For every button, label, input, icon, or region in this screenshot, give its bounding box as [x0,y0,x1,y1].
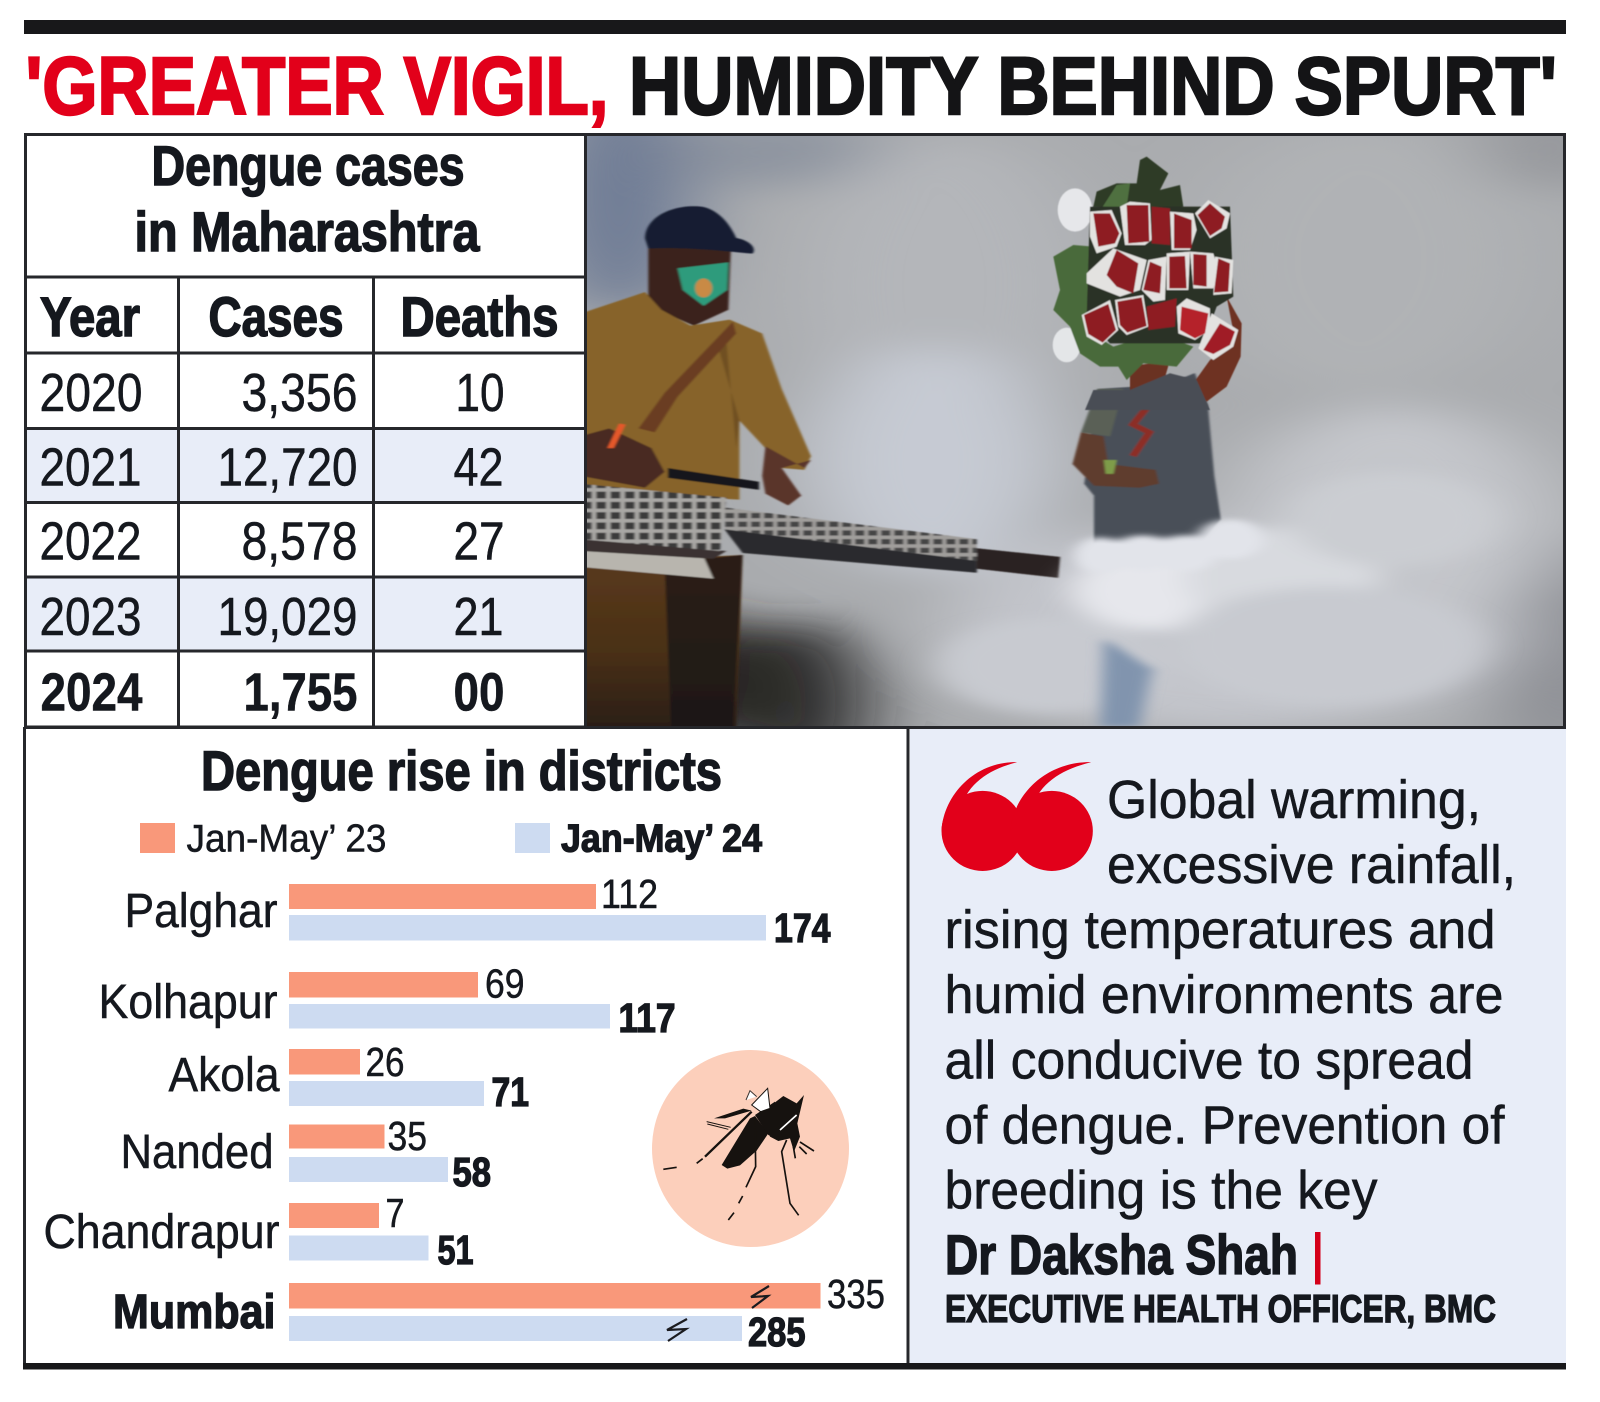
table column headers [40,285,558,348]
photo frame [586,134,1564,726]
photo smoke background [587,136,1563,726]
bars: Mumbai: 335 [827,1271,885,1317]
legend: Jan-May’ 24 [561,818,762,860]
quote text: all conducive to spread [944,1030,1474,1090]
quote text: of dengue. Prevention of [944,1096,1505,1156]
table row 2023: 2023 [40,587,142,647]
bars: Chandrapur: 7 [386,1190,404,1236]
table row shading [26,429,586,651]
table row 2024 [40,662,504,722]
table row 2021: 42 [454,438,504,498]
table row 2024: 1,755 [244,662,358,722]
table heading [134,134,480,263]
bars: Nanded: 35 [388,1113,427,1159]
table column headers: Deaths [400,285,558,348]
bars: Kolhapur [98,960,676,1041]
bars: Nanded [120,1113,491,1195]
table heading: Dengue cases [152,134,464,197]
table row 2024: 2024 [40,662,142,722]
bars: Palghar [124,871,831,951]
bars: Nanded: 58 [452,1149,491,1195]
fog plume [928,524,1489,716]
table row 2022: 2022 [40,512,142,572]
bars: Kolhapur: Kolhapur [98,976,278,1029]
quote attribution: Dr Daksha Shah [945,1223,1298,1286]
chart heading: Dengue rise in districts [201,739,722,802]
table row 2020: 2020 [40,363,142,423]
table row 2021: 2021 [40,438,142,498]
table row 2023: 21 [454,587,504,647]
panel: photo of fogging worker and flower vendor [587,136,1563,726]
bars: Palghar: 112 [601,871,658,917]
bars: Palghar: 174 [774,905,831,951]
bars: Akola: 26 [366,1039,404,1085]
fog puffs [1074,519,1263,573]
table outer frame [26,134,586,727]
table row 2023 [40,587,504,647]
legend [140,818,762,860]
table row 2024: 00 [454,662,504,722]
bars: Mumbai [113,1271,885,1355]
quote text: excessive rainfall, [1107,835,1516,895]
bars: Chandrapur: 51 [438,1227,474,1273]
bars: Nanded: Nanded [120,1126,274,1179]
table row 2022: 27 [454,512,504,572]
icon: red quotation marks [942,762,1093,871]
axis break marks [667,1286,769,1341]
flower bundle on vendor's head [1053,157,1242,410]
bars: Kolhapur: 69 [485,960,524,1006]
table row 2020: 3,356 [242,363,358,423]
table row 2021: 12,720 [218,438,358,498]
flower vendor body [1073,373,1221,547]
quote text: humid environments are [944,965,1504,1025]
legend: Jan-May’ 23 [186,818,386,860]
title: 'GREATER VIGIL, [26,41,608,132]
table row 2022 [40,512,504,572]
table row 2020: 10 [456,363,504,423]
table column headers: Year [40,285,140,348]
title [26,41,1557,132]
table column headers: Cases [208,285,344,348]
panel: dengue cases table [25,134,586,727]
panel: expert quote [910,729,1566,1363]
man spraying [580,206,1060,729]
quote text: breeding is the key [944,1160,1378,1220]
bars: Palghar: Palghar [124,885,278,938]
arm and head [1193,297,1242,402]
table row 2020 [40,363,504,423]
panel: dengue rise in districts chart [44,739,885,1355]
top rule [24,20,1566,34]
quote text: Global warming, [1107,770,1481,830]
bottom rule [23,1363,1566,1370]
bars: Akola: Akola [168,1049,280,1102]
table heading: in Maharashtra [134,200,480,263]
icon: mosquito in peach circle [652,1050,849,1247]
bars: Chandrapur [44,1190,474,1273]
bars: Mumbai: Mumbai [113,1286,276,1339]
bars: Akola [168,1039,529,1115]
vendor legs in fog [1100,638,1153,727]
bars: Akola: 71 [492,1069,529,1115]
bars: Kolhapur: 117 [618,995,676,1041]
quote attribution [945,1223,1496,1331]
table row 2023: 19,029 [218,587,358,647]
quote text: rising temperatures and [944,900,1496,960]
bars: Chandrapur: Chandrapur [44,1206,280,1259]
table row 2022: 8,578 [242,512,358,572]
table row 2021 [40,438,504,498]
quote text [944,770,1516,1220]
bars: Mumbai: 285 [748,1309,806,1355]
greenery [1053,245,1193,380]
